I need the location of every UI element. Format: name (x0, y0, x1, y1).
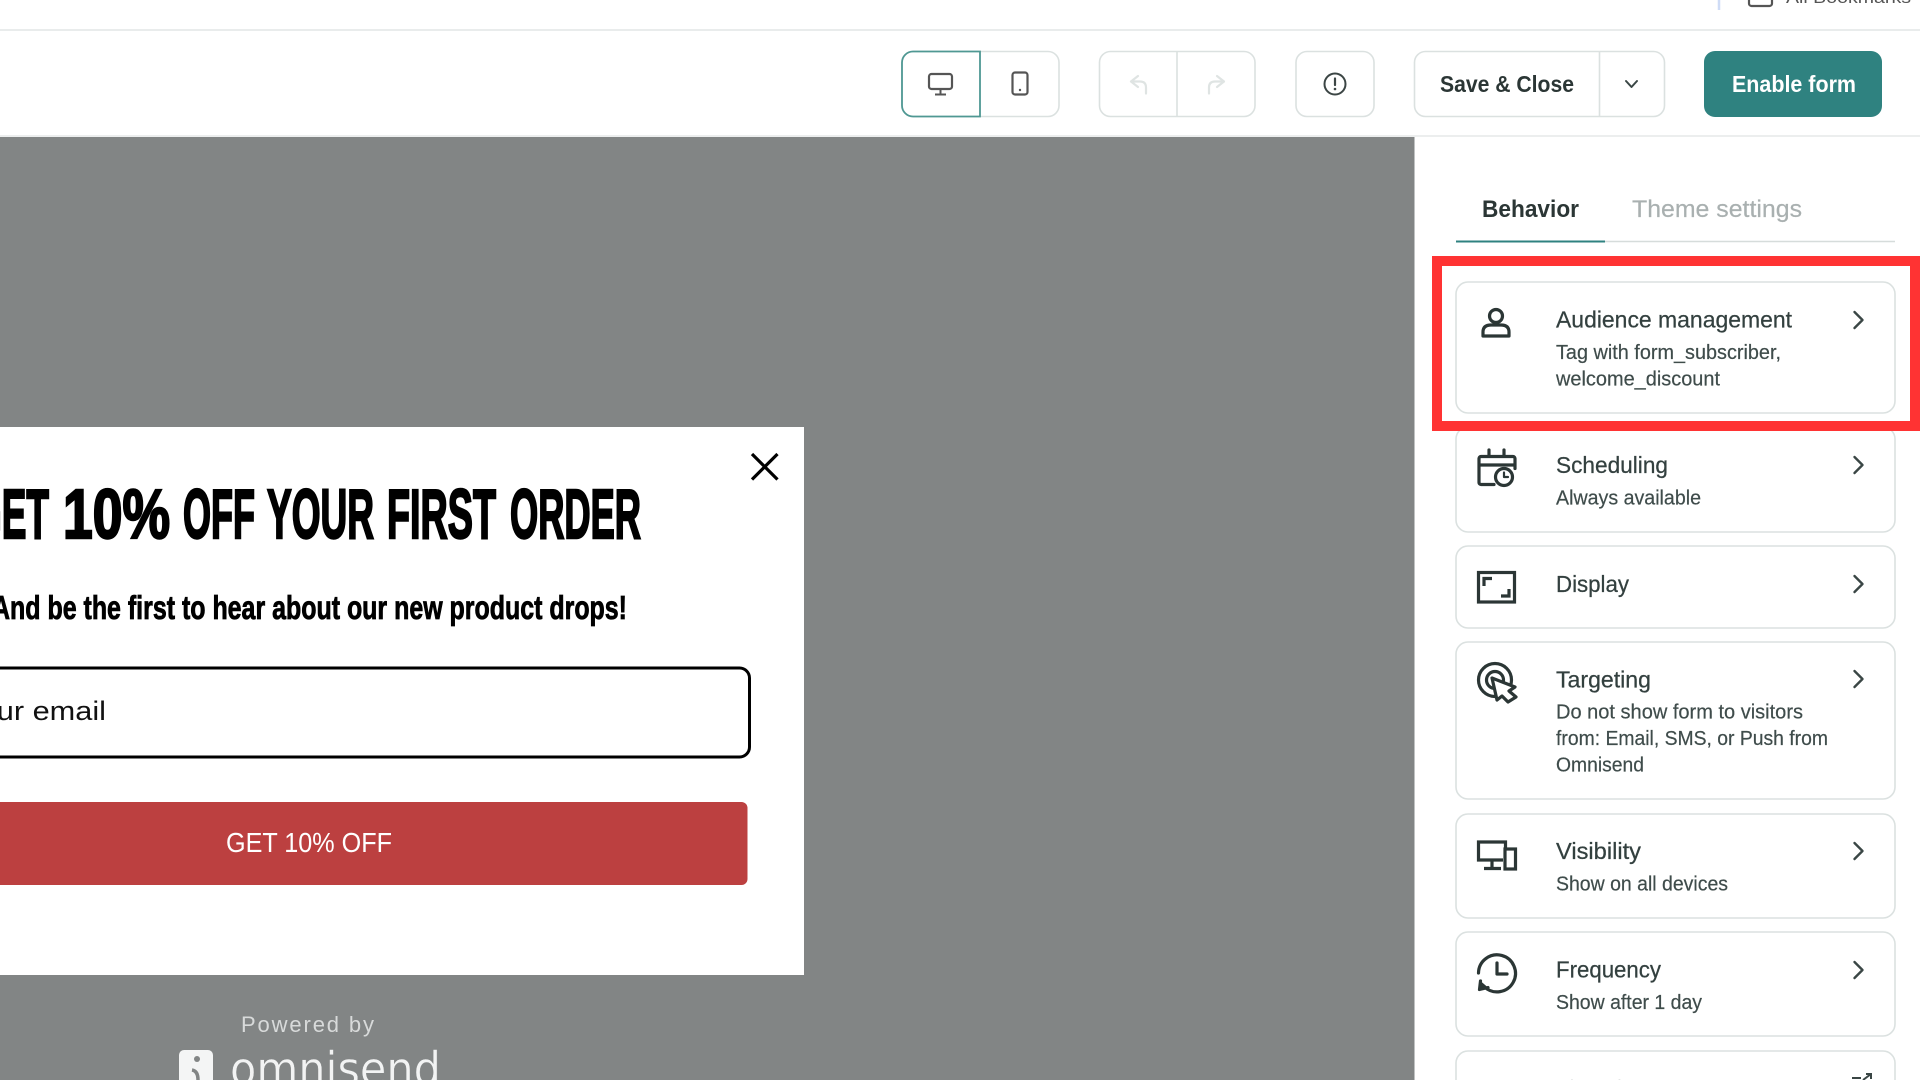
gray preview canvas (0, 137, 1414, 1080)
card: scheduling: Scheduling (1556, 452, 1668, 478)
card: scheduling (1456, 427, 1895, 532)
card: audience management (1456, 282, 1895, 413)
card: frequency: Show after 1 day (1556, 991, 1703, 1014)
card: display (1456, 546, 1895, 628)
enable form button: Enable form (1732, 71, 1856, 97)
card: display: Display (1556, 571, 1629, 597)
card: A/B testing, cut off (1456, 1051, 1895, 1080)
icon: external link (1852, 1074, 1871, 1080)
powered by omnisend (179, 1012, 441, 1080)
tabs: Theme settings (1632, 196, 1802, 223)
card: targeting (1456, 642, 1895, 799)
icon: display frame (1478, 572, 1514, 602)
card: audience management: Audience management (1556, 306, 1792, 332)
save and close split button: Save & Close (1440, 71, 1574, 97)
submit button (0, 802, 748, 885)
icon: person (1483, 310, 1509, 336)
card: visibility: Visibility (1556, 838, 1641, 864)
card: visibility: Show on all devices (1556, 872, 1728, 896)
popup headline: 10% (63, 475, 170, 553)
card: frequency: Frequency (1556, 956, 1661, 982)
red highlight box (1437, 261, 1915, 426)
editor toolbar (0, 51, 1920, 136)
card: scheduling: Always available (1556, 486, 1701, 510)
powered by omnisend: Powered by (241, 1012, 374, 1037)
tabs: Behavior (1482, 196, 1579, 223)
popup subheading: And be the first to hear about our new product drops! (0, 589, 627, 626)
popup form (0, 427, 804, 975)
popup headline: ORDER (510, 475, 641, 553)
email input (0, 668, 750, 757)
card: targeting: Targeting (1556, 666, 1651, 692)
popup headline: FIRST (387, 475, 496, 553)
card: frequency (1456, 932, 1895, 1036)
popup headline: OFF (183, 475, 255, 553)
icon: calendar with clock (1479, 450, 1515, 486)
info button (1296, 52, 1374, 116)
submit button: GET 10% OFF (226, 827, 392, 858)
tabs (1456, 196, 1895, 242)
omnisend logo mark (179, 1050, 213, 1080)
browser bookmarks bar (0, 0, 1920, 30)
icon: desktop and phone (1478, 842, 1516, 869)
card: audience management: Tag with form_subscriber, (1556, 341, 1781, 364)
device toggle: desktop and mobile (902, 52, 1059, 116)
card: targeting: from: Email, SMS, or Push from (1556, 727, 1828, 750)
settings sidebar (1437, 196, 1915, 1080)
close icon (752, 454, 778, 480)
icon: clock with return arrow (1478, 955, 1515, 992)
enable form button (1704, 51, 1882, 117)
popup headline (0, 475, 641, 553)
popup headline: YOUR (267, 475, 374, 553)
card: targeting: Omnisend (1556, 754, 1644, 776)
card: targeting: Do not show form to visitors (1556, 700, 1803, 724)
icon: cursor target (1478, 664, 1516, 702)
save and close split button (1414, 52, 1664, 116)
card: visibility (1456, 814, 1895, 918)
card: audience management: welcome_discount (1555, 368, 1720, 390)
undo and redo buttons (1100, 52, 1255, 116)
